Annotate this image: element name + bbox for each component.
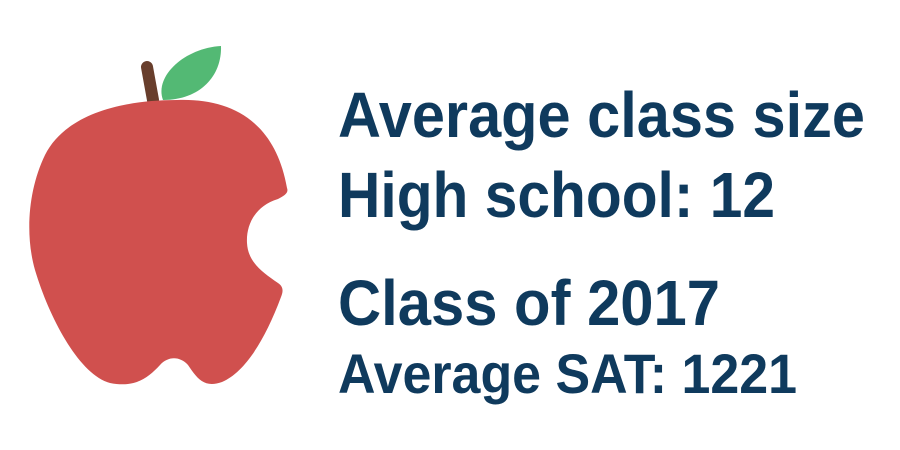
heading: average class size: Average class size	[338, 79, 865, 151]
apple leaf	[161, 46, 221, 100]
text block: class size	[338, 79, 865, 231]
icon: apple	[29, 46, 287, 384]
stat: average SAT: Average SAT: 1221	[338, 342, 797, 405]
heading: class of 2017: Class of 2017	[338, 267, 720, 339]
text block: class of 2017	[338, 267, 797, 405]
apple body	[29, 100, 287, 384]
stat: high school 12: High school: 12	[338, 159, 775, 231]
apple stem	[147, 67, 153, 100]
